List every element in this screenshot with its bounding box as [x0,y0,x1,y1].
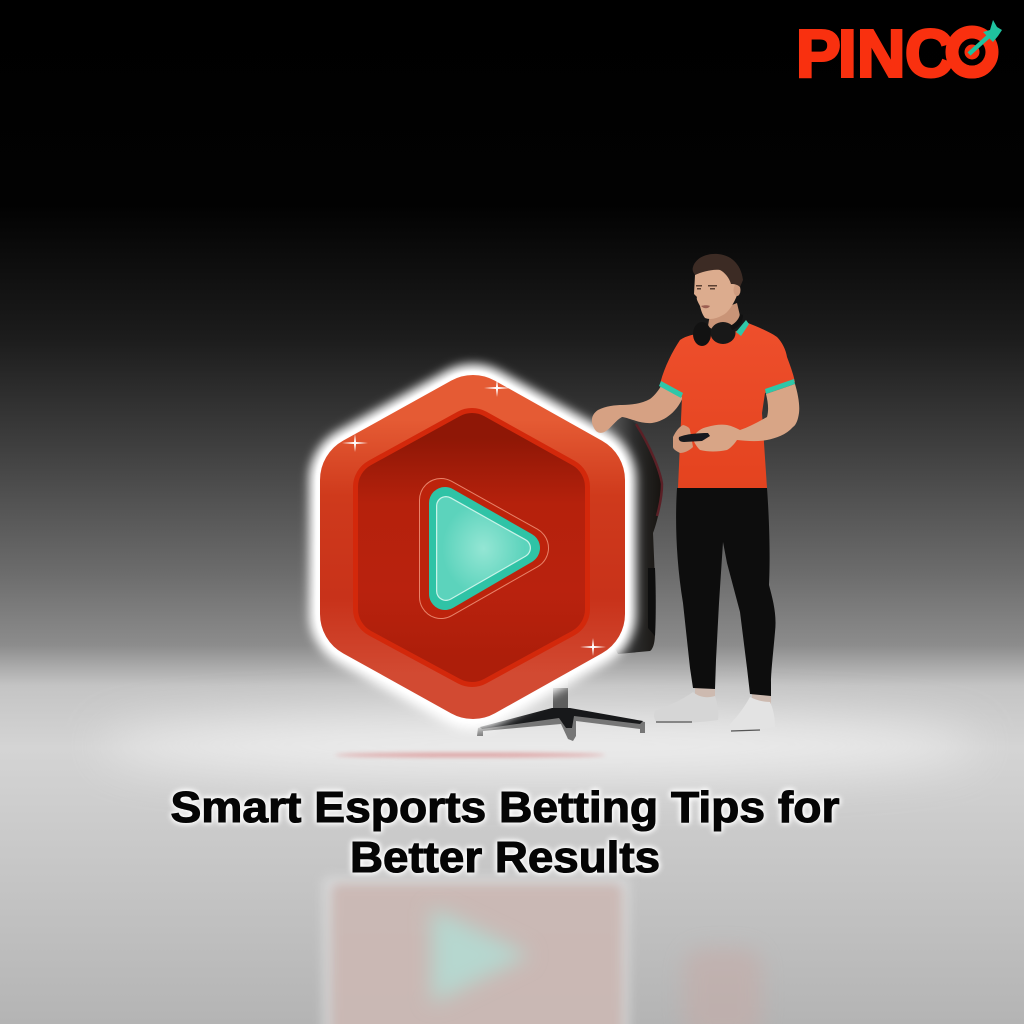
sparkles [342,379,606,656]
chair back [600,417,662,654]
mouth [701,305,710,308]
ear [734,284,740,296]
chair armrest [648,568,656,636]
back ankle [695,686,715,700]
floor reflection of hexagon [322,876,762,1024]
front shoe sole [731,730,760,731]
back shoe [654,692,718,723]
t-shirt right cuff [765,379,795,394]
chair back red trim [636,424,662,516]
eyebrows and eyes [696,285,717,290]
hexagon outer rim [365,420,580,674]
left arm reaching chair [622,384,683,423]
chair column [553,676,568,712]
play button highlight line [446,506,521,591]
title line 1: Smart Esports Betting Tips for [170,783,840,832]
logo arrow [969,20,1002,54]
logo wordmark: PINCO [796,16,998,92]
hexagon inner recess [383,438,560,657]
game controller [679,433,710,442]
t-shirt [660,323,795,488]
t-shirt collar [736,320,749,336]
headphones [693,314,743,346]
hand on chair [592,405,626,433]
logo target hole [958,38,986,66]
neck [708,303,741,331]
hair [693,254,743,287]
floor shadow under hexagon [335,753,605,757]
left hand holding controller [673,425,693,453]
hexagon play badge [365,420,580,674]
logo [796,16,1002,92]
logo target ring [952,32,992,72]
front shoe [730,697,775,731]
play button face [446,506,521,591]
title line 2: Better Results [350,833,660,882]
hexagon glow [365,420,580,674]
title [170,783,840,882]
front ankle [752,692,771,704]
logo target center [964,44,980,60]
back shoe sole [656,721,692,723]
floor highlight [100,713,980,777]
face [694,266,739,319]
gaming chair [477,417,662,741]
chair base [477,708,645,741]
t-shirt left cuff [659,381,683,398]
pants [676,488,776,696]
play button teal edge [445,503,524,594]
right arm holding controller [693,384,799,452]
person [622,254,799,731]
play button outer fill [441,500,527,597]
play button outer line [441,500,527,597]
head [693,254,743,319]
hexagon inner border [383,438,560,657]
